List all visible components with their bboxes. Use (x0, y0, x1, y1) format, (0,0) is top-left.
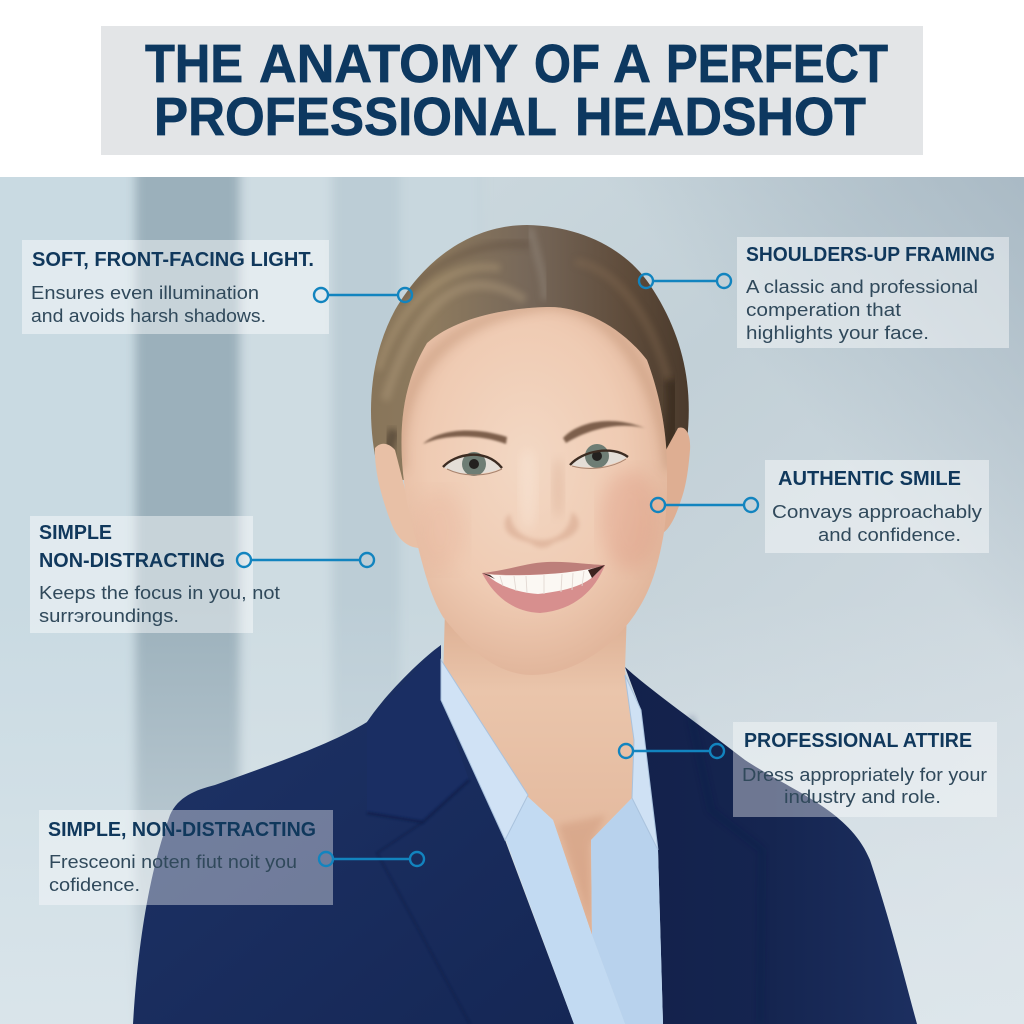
title banner (101, 26, 923, 155)
title banner: A (613, 35, 651, 94)
callout: professional attire: Dress appropriately for your (742, 765, 987, 785)
shirt right panel (591, 798, 663, 1024)
callout: simple non-distracting lower: cofidence. (49, 875, 140, 895)
callout: simple non-distracting lower (39, 810, 424, 905)
callout: simple non-distracting lower: SIMPLE, NON-DISTRACTING (48, 819, 316, 841)
callout: authentic smile: and confidence. (818, 525, 961, 545)
callout: simple non-distracting background (30, 516, 374, 633)
callout: soft front-facing light: Ensures even illumination (31, 283, 259, 303)
callout: professional attire: PROFESSIONAL ATTIRE (744, 730, 972, 752)
callout: simple non-distracting background: surrэroundings. (39, 606, 179, 626)
eye left (443, 452, 502, 476)
collar left (441, 660, 528, 840)
jacket lapel shading (367, 717, 762, 1024)
eyebrows (423, 421, 645, 444)
shirt placket (505, 797, 625, 1024)
callout: simple non-distracting lower: Fresceoni noten fiut noit you (49, 852, 297, 872)
callout: simple non-distracting background: SIMPLE (39, 522, 112, 544)
face (401, 307, 667, 675)
eye right (570, 444, 628, 468)
jacket right half (625, 667, 917, 1024)
woman portrait (133, 225, 917, 1024)
callout: shoulders-up framing: highlights your face. (746, 323, 929, 343)
callout: shoulders-up framing: comperation that (746, 300, 901, 320)
nose (505, 512, 579, 548)
jacket left half (133, 645, 574, 1024)
callout: authentic smile: AUTHENTIC SMILE (778, 468, 961, 490)
callout: shoulders-up framing: A classic and professional (746, 277, 978, 297)
callout: shoulders-up framing (639, 237, 1009, 348)
callout: authentic smile: Convays approachably (772, 502, 982, 522)
callout: simple non-distracting background: NON-DISTRACTING (39, 550, 225, 572)
ears (375, 444, 420, 548)
neck (443, 610, 634, 935)
callout: authentic smile (651, 460, 989, 553)
title banner: PROFESSIONAL (154, 88, 557, 147)
callout: soft front-facing light: and avoids harsh shadows. (31, 306, 266, 326)
jacket left collar (367, 645, 441, 722)
title banner: HEADSHOT (575, 88, 866, 147)
hair (371, 225, 689, 480)
title banner: OF (534, 35, 600, 94)
callout: soft front-facing light: SOFT, FRONT-FACING LIGHT. (32, 249, 314, 271)
title banner: THE (145, 35, 243, 94)
smile (482, 562, 605, 613)
title banner: ANATOMY (259, 35, 518, 94)
chest shading (560, 816, 603, 904)
callout: professional attire (619, 722, 997, 817)
face shading (400, 304, 670, 570)
callout: simple non-distracting background: Keeps the focus in you, not (39, 583, 280, 603)
title banner: PERFECT (666, 35, 888, 94)
callout: soft front-facing light (22, 240, 412, 334)
collar right (625, 675, 658, 850)
callout: shoulders-up framing: SHOULDERS-UP FRAMING (746, 244, 995, 266)
callout: professional attire: industry and role. (784, 787, 941, 807)
